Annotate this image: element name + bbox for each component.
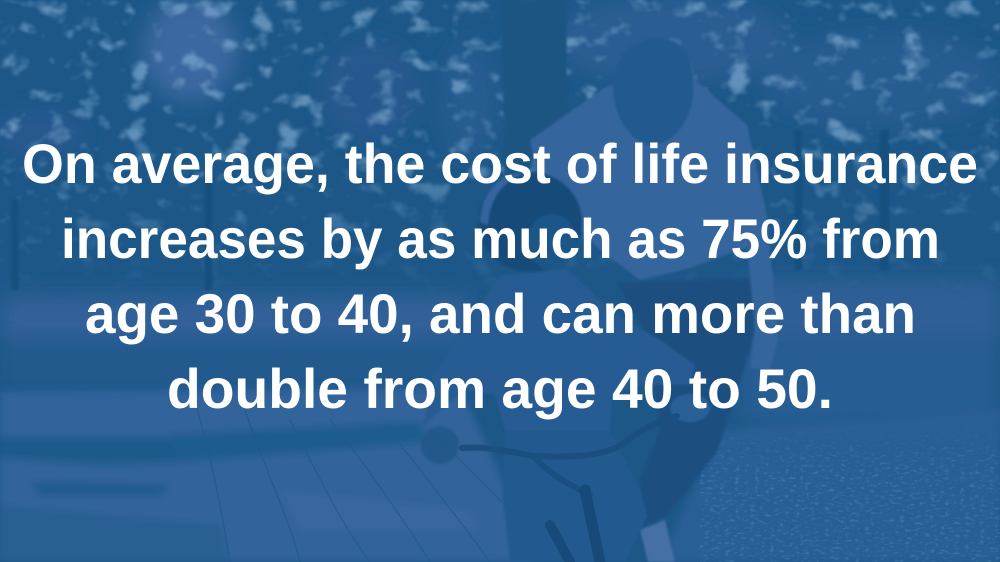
legs (503, 430, 647, 562)
face (528, 214, 576, 270)
main statement text: double from age 40 to 50. (167, 357, 833, 420)
hair and helmet (478, 172, 582, 272)
arm (745, 215, 778, 370)
figure: father (530, 38, 778, 562)
head (613, 38, 693, 145)
hands (421, 426, 459, 464)
tree trunks (12, 0, 889, 290)
jacket (423, 269, 695, 450)
bicycle handlebars and frame (462, 416, 677, 562)
shirt (530, 78, 767, 280)
main statement text: On average, the cost of life insurance (22, 132, 978, 195)
main statement text: increases by as much as 75% from (61, 207, 940, 270)
shoe (640, 520, 675, 562)
tree canopy (0, 0, 1000, 425)
jeans (617, 278, 767, 527)
brick pattern on path (195, 400, 510, 562)
main statement text: age 30 to 40, and can more than (85, 282, 916, 345)
path and lawn (0, 388, 1000, 562)
figure: child on bike (421, 172, 710, 562)
